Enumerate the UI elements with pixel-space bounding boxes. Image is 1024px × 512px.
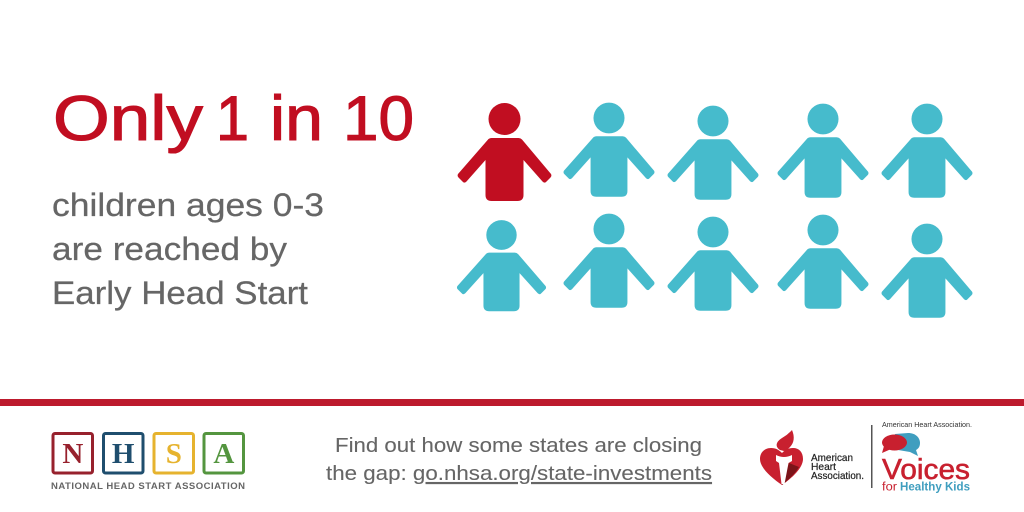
call to action text: Find out how some states are closing — [335, 434, 702, 457]
icon: heart and torch — [760, 430, 803, 485]
logo: American Heart Association: American — [811, 452, 853, 464]
divider band — [0, 399, 1024, 406]
headline: in — [270, 84, 323, 154]
logo: Voices for Healthy Kids: American Heart Association. — [882, 420, 972, 429]
logo: Voices for Healthy Kids: Healthy Kids — [900, 480, 970, 494]
logo: Voices for Healthy Kids: for — [882, 482, 897, 494]
logo: National Head Start Association: H — [112, 438, 135, 470]
logo: National Head Start Association: N — [62, 438, 83, 470]
logo: National Head Start Association: S — [166, 438, 182, 470]
logo: American Heart Association: Association. — [811, 470, 864, 482]
logo: National Head Start Association: A — [213, 438, 234, 470]
call to action text: the gap: go.nhsa.org/state-investments — [326, 462, 712, 485]
logo divider — [871, 425, 872, 488]
icon: speech bubbles — [882, 433, 920, 456]
headline: 10 — [343, 84, 414, 154]
logo: National Head Start Association — [51, 434, 245, 492]
icon: red person — [458, 103, 551, 201]
headline: Only — [53, 84, 204, 154]
pictogram: 1 red person of 10 — [457, 103, 972, 318]
headline — [53, 84, 414, 154]
logo: Voices for Healthy Kids — [882, 420, 972, 494]
logo: American Heart Association: Heart — [811, 461, 836, 473]
subheading text — [52, 187, 324, 311]
logo: American Heart Association — [760, 430, 864, 485]
headline: 1 — [216, 84, 249, 154]
logo: Voices for Healthy Kids: Voices — [882, 454, 970, 486]
logo: National Head Start Association: NATIONAL HEAD START ASSOCIATION — [51, 481, 245, 492]
subheading text: children ages 0-3 — [52, 187, 324, 223]
call to action text — [326, 434, 712, 485]
subheading text: Early Head Start — [52, 275, 308, 311]
subheading text: are reached by — [52, 231, 287, 267]
icon: teal people — [457, 103, 972, 318]
